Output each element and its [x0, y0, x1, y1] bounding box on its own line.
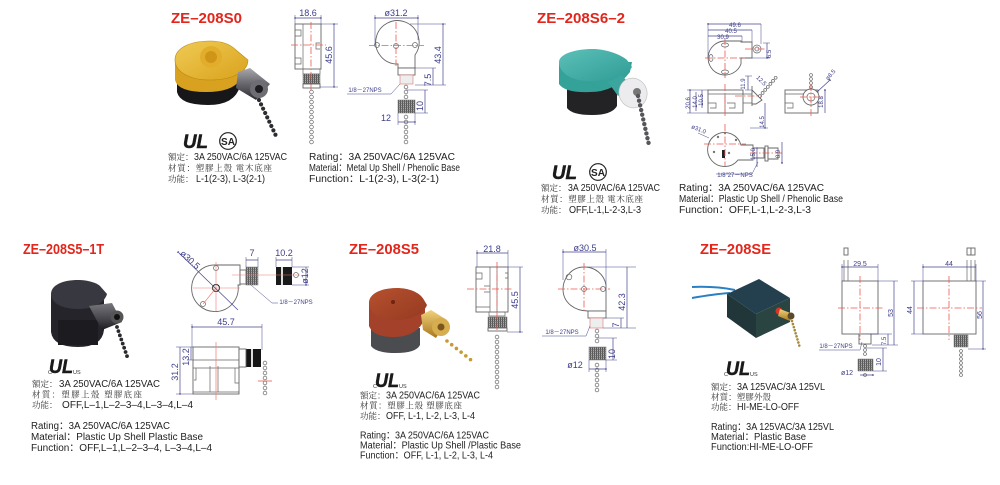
English spec text	[711, 422, 834, 453]
icon: CSA mark	[590, 164, 606, 180]
drawing: front view: 10	[607, 349, 617, 359]
photo: teal switch	[559, 49, 651, 145]
Chinese spec text: HI-ME-LO-OFF	[737, 402, 799, 413]
drawing: bottom view: ø31.0	[690, 124, 707, 136]
icon: cULus mark: UL	[49, 357, 73, 378]
English spec text: Rating：3A 250VAC/6A 125VAC	[309, 152, 455, 163]
drawing: side view: 11.9	[741, 78, 747, 90]
icon: cULus mark: C	[373, 384, 377, 390]
drawing: top view: 30.9	[717, 35, 729, 41]
drawing: front view: ø31.2	[384, 8, 408, 18]
drawing: front view: 10	[415, 101, 425, 111]
drawing: rear view: ø8.5	[825, 68, 838, 82]
drawing: top view: 6.5	[767, 49, 773, 58]
drawing: bottom view	[690, 124, 782, 179]
Chinese spec text: 3A 250VAC/6A 125VAC	[194, 152, 287, 163]
drawing: side view: 12.5	[754, 75, 767, 88]
drawing: side view: 29.5	[853, 261, 867, 268]
drawing: front view: 43.4	[433, 46, 443, 64]
drawing: front view	[542, 243, 636, 392]
drawing: side view: 10.5	[699, 94, 705, 106]
drawing: front view: 44	[907, 306, 914, 314]
English spec text: Function：OFF,L–1,L–2–3–4, L–3–4,L–4	[31, 443, 212, 454]
photo: amber switch	[175, 41, 277, 138]
icon: cULus mark: US	[73, 370, 81, 376]
drawing: front view: 1/8－27NPS	[348, 88, 382, 94]
icon: CSA mark: SA	[591, 168, 605, 179]
Chinese spec text: 3A 250VAC/6A 125VAC	[568, 183, 660, 194]
Chinese spec text: 材質：塑膠上殼 塑膠底座	[32, 390, 142, 400]
Chinese spec text: 額定：	[541, 183, 567, 193]
Chinese spec text: L-1(2-3), L-3(2-1)	[196, 174, 265, 185]
photo: box switch with blue wires	[692, 279, 800, 348]
English spec text: Function：OFF,L-1,L-2-3,L-3	[679, 205, 811, 216]
title: ZE–208S5–1T	[23, 241, 104, 258]
Chinese spec text: 額定：	[360, 390, 386, 400]
English spec text: Rating：3A 250VAC/6A 125VAC	[360, 430, 489, 442]
drawing: top view: 40.5	[725, 29, 737, 35]
Chinese spec text: 功能：	[32, 400, 58, 410]
drawing: side view: 1/8－27NPS	[819, 344, 853, 350]
drawing: side view: 45.6	[324, 46, 334, 64]
icon: UL mark: UL	[552, 163, 577, 184]
drawing: side view	[170, 317, 272, 400]
English spec text: Rating：3A 250VAC/6A 125VAC	[679, 183, 824, 194]
drawing: top view: 49.6	[729, 23, 741, 29]
drawing: side view: 14.0	[693, 96, 699, 108]
title: ZE–208S5	[349, 241, 419, 258]
Chinese spec text: OFF,L–1,L–2–3–4,L–3–4,L–4	[62, 400, 193, 411]
English spec text: Material：Plastic Up Shell Plastic Base	[31, 432, 203, 443]
drawing: top view: 10.2	[275, 248, 293, 258]
English spec text: Rating：3A 250VAC/6A 125VAC	[31, 421, 170, 432]
drawing: front view: 44	[945, 261, 953, 268]
English spec text: Rating：3A 125VAC/3A 125VL	[711, 422, 834, 433]
English spec text	[360, 430, 521, 462]
drawing: front view: 12	[381, 113, 391, 123]
drawing: side view: 45.7	[217, 317, 235, 327]
English spec text: Function:HI-ME-LO-OFF	[711, 442, 813, 453]
Chinese spec text: 3A 250VAC/6A 125VAC	[59, 379, 160, 390]
panel: ZE-208S5-1T	[23, 241, 313, 454]
drawing: side view: 31.2	[170, 363, 180, 381]
icon: cULus mark: UL	[726, 359, 750, 380]
English spec text: Material：Metal Up Shell / Phenolic Base	[309, 163, 460, 174]
drawing: side view	[291, 8, 338, 147]
title: ZE–208SE	[700, 241, 771, 258]
English spec text: Material：Plastic Up Shell /Plastic Base	[360, 440, 521, 452]
drawing: front view	[907, 248, 986, 378]
drawing: side view: 53	[888, 309, 895, 317]
Chinese spec text: 功能：	[711, 402, 737, 412]
panel: ZE-208S6-2	[537, 10, 843, 216]
drawing: bottom view: 8.9	[776, 149, 782, 158]
icon: cULus mark: C	[724, 372, 728, 378]
drawing: top view	[178, 248, 313, 312]
drawing: side view: 20.6	[686, 97, 692, 109]
Chinese spec text: 材質：塑膠外殼	[711, 392, 771, 402]
icon: cULus mark: US	[399, 384, 407, 390]
drawing: side view: 21.8	[483, 244, 501, 254]
English spec text: Function：L-1(2-3), L-3(2-1)	[309, 174, 439, 185]
icon: cULus mark: UL	[375, 371, 399, 392]
drawing: side view	[467, 244, 523, 392]
English spec text: Material：Plastic Base	[711, 432, 806, 443]
drawing: front view: 7	[611, 322, 621, 328]
Chinese spec text	[32, 379, 193, 411]
Chinese spec text: 材質：塑膠上殼 電木底座	[541, 194, 643, 204]
drawing: side view	[819, 248, 898, 378]
title: ZE–208S6–2	[537, 10, 625, 27]
icon: cULus mark: C	[48, 370, 52, 376]
Chinese spec text: 功能：	[360, 411, 386, 421]
drawing: side view: 18.6	[299, 8, 317, 18]
drawing: top view: 1/8－27NPS	[279, 300, 313, 306]
photo: black switch	[51, 280, 128, 359]
drawing: rear view: 18.8	[819, 96, 825, 108]
English spec text: Material：Plastic Up Shell / Phenolic Base	[679, 194, 843, 205]
drawing: front view: 1/8－27NPS	[545, 330, 579, 336]
Chinese spec text: 材質：塑膠上殼 電木底座	[168, 163, 272, 173]
Chinese spec text	[168, 152, 287, 185]
drawing: bottom view: 15.0	[751, 148, 757, 160]
drawing: top view	[705, 23, 773, 78]
drawing: side view: ø12	[841, 370, 853, 377]
drawing: front view: 56	[977, 311, 984, 319]
Chinese spec text: 額定：	[32, 379, 58, 389]
drawing: side view: 10	[876, 358, 883, 366]
drawing: front view	[347, 8, 446, 147]
drawing: top view: 7	[249, 248, 255, 258]
Chinese spec text	[541, 183, 660, 216]
drawing: rear view	[785, 68, 838, 116]
drawing: front view: 42.3	[617, 293, 627, 311]
Chinese spec text: 3A 250VAC/6A 125VAC	[386, 390, 480, 402]
panel: ZE-208S0	[168, 8, 460, 185]
English spec text: Function：OFF, L-1, L-2, L-3, L-4	[360, 450, 493, 462]
photo: red switch	[369, 288, 471, 360]
Chinese spec text: 額定：	[168, 152, 194, 162]
drawing: side view: 45.5	[510, 291, 520, 309]
drawing: front view: ø12	[567, 360, 583, 370]
title: ZE–208S0	[171, 10, 242, 27]
drawing: side view	[686, 75, 778, 128]
icon: UL mark: UL	[183, 132, 208, 153]
drawing: side view: 7.5	[882, 336, 888, 345]
Chinese spec text: 額定：	[711, 382, 737, 392]
icon: CSA mark	[220, 133, 236, 149]
Chinese spec text: 材質：塑膠上殼 塑膠底座	[360, 400, 462, 410]
panel: ZE-208SE	[692, 241, 986, 453]
drawing: front view: ø30.5	[573, 243, 597, 253]
English spec text	[679, 183, 843, 216]
drawing: top view: ø30.5	[178, 248, 202, 271]
English spec text	[31, 421, 212, 454]
Chinese spec text: 3A 125VAC/3A 125VL	[737, 382, 825, 393]
drawing: side view: 13.2	[181, 348, 191, 366]
Chinese spec text: 功能：	[168, 174, 194, 184]
drawing: top view: ø12	[300, 268, 310, 284]
panel: ZE-208S5	[349, 241, 636, 462]
English spec text	[309, 152, 460, 185]
Chinese spec text	[360, 390, 480, 422]
icon: cULus mark: US	[750, 372, 758, 378]
icon: CSA mark: SA	[221, 137, 235, 148]
Chinese spec text	[711, 382, 825, 413]
Chinese spec text: OFF,L-1,L-2-3,L-3	[569, 205, 641, 216]
drawing: side view: 14.5	[760, 116, 766, 128]
Chinese spec text: OFF, L-1, L-2, L-3, L-4	[386, 411, 475, 422]
drawing: front view: 7.5	[423, 74, 433, 86]
drawing: bottom view: 1/8"27－NPS	[717, 173, 753, 179]
Chinese spec text: 功能：	[541, 205, 567, 215]
